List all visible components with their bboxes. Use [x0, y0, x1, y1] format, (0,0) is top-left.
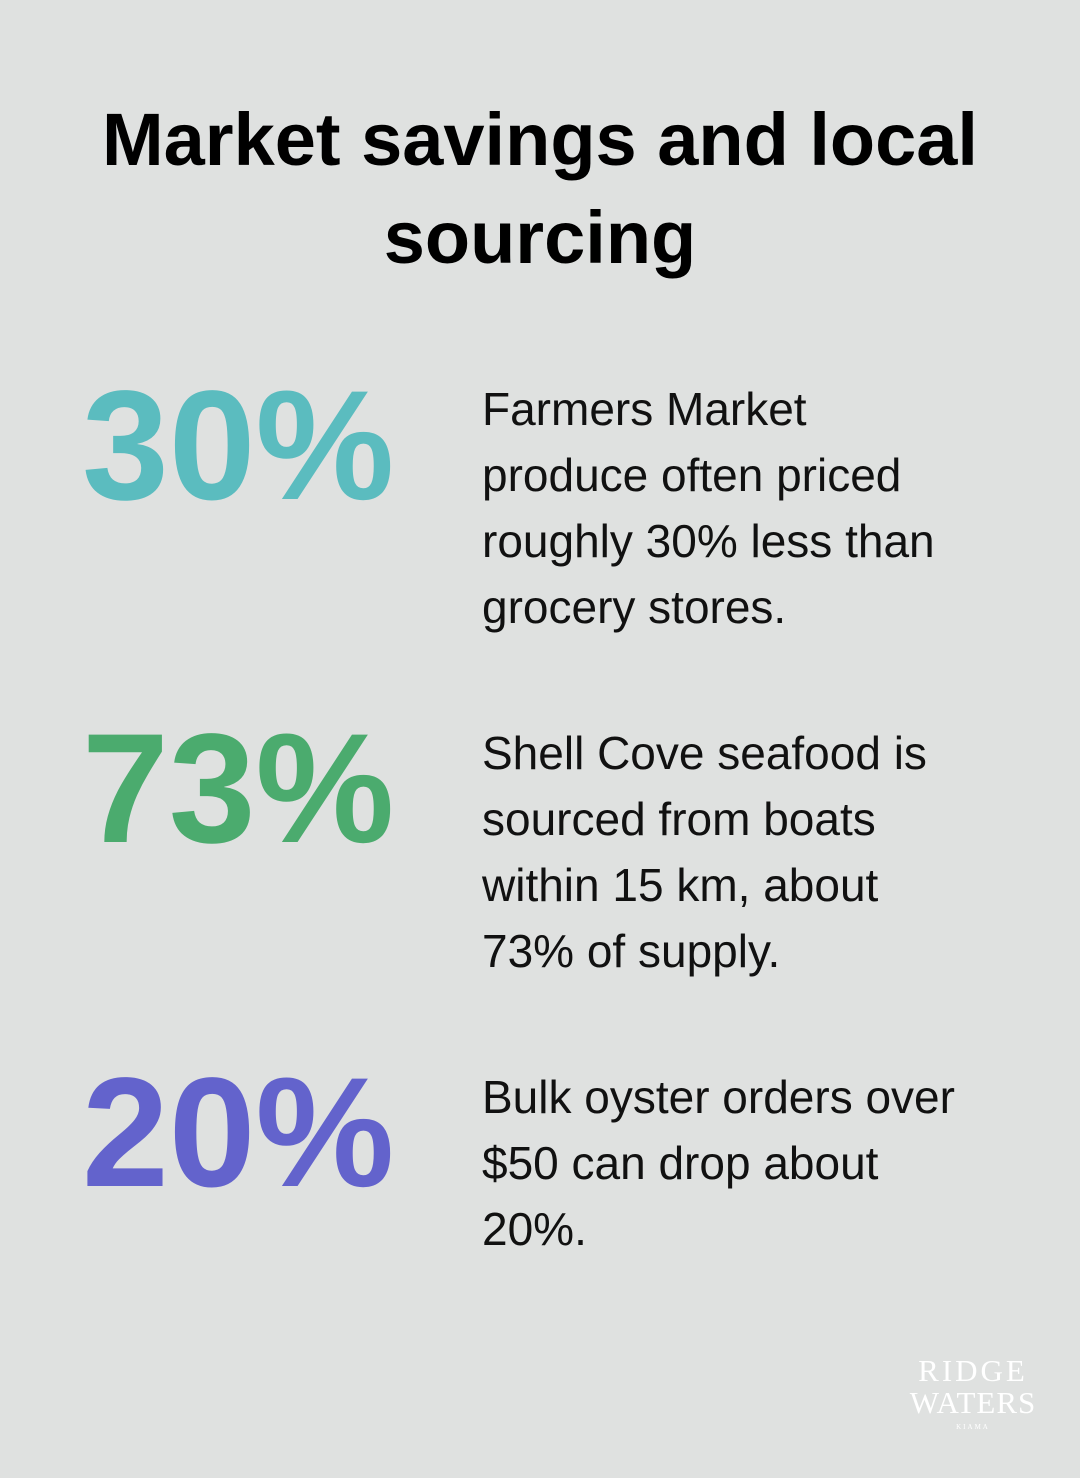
title [102, 98, 978, 279]
title: sourcing [384, 196, 696, 279]
text: shell cove seafood: sourced from boats [482, 793, 876, 845]
text: farmers market: grocery stores. [482, 581, 786, 633]
text: bulk oyster: Bulk oyster orders over [482, 1071, 955, 1123]
text: bulk oyster: 20%. [482, 1203, 587, 1255]
stat: 20%: 20% [82, 1046, 394, 1220]
stat: 73%: 73% [82, 702, 394, 876]
stat: 30%: 30% [82, 359, 394, 533]
logo: ridge waters: WATERS [910, 1385, 1036, 1420]
text: shell cove seafood: within 15 km, about [482, 859, 878, 911]
logo: ridge waters: KIAMA [956, 1423, 990, 1431]
text: farmers market: roughly 30% less than [482, 515, 935, 567]
text: shell cove seafood: Shell Cove seafood is [482, 727, 927, 779]
text: shell cove seafood: 73% of supply. [482, 925, 780, 977]
text: farmers market: Farmers Market [482, 383, 807, 435]
text: farmers market [482, 383, 935, 633]
text: shell cove seafood [482, 727, 927, 977]
logo: ridge waters [910, 1353, 1036, 1431]
text: bulk oyster [482, 1071, 955, 1255]
text: bulk oyster: $50 can drop about [482, 1137, 878, 1189]
logo: ridge waters: RIDGE [918, 1353, 1028, 1388]
text: farmers market: produce often priced [482, 449, 901, 501]
title: Market savings and local [102, 98, 978, 181]
